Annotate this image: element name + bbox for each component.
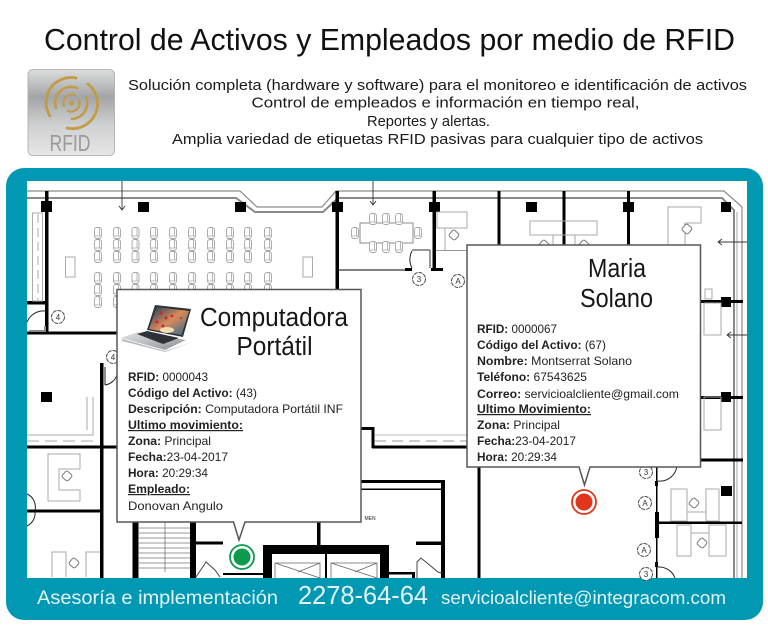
icon: green location marker (230, 545, 254, 569)
callout details: Código del Activo: (43) (128, 386, 257, 400)
callout details: Descripción: Computadora Portátil INF (128, 402, 343, 416)
classroom chairs (94, 228, 272, 308)
grid markers: 4 (56, 313, 61, 322)
callout heading: Portátil (236, 333, 312, 361)
callout heading (580, 255, 653, 313)
callout details: Ultimo Movimiento: (477, 402, 591, 416)
callout details: Fecha:23-04-2017 (128, 450, 228, 464)
callout details: RFID: 0000043 (128, 370, 208, 384)
icon: red location marker (572, 490, 596, 514)
grid markers: 3 (417, 275, 422, 284)
footer contact: 2278-64-64 (298, 582, 428, 610)
callout details: Nombre: Montserrat Solano (477, 354, 632, 368)
text block: description: Solución completa (hardware y software) para el monitoreo e identificación de activos (128, 78, 747, 94)
conference chairs (61, 214, 708, 569)
section arrows (119, 181, 747, 338)
door arcs (27, 250, 677, 578)
outer perimeter lines (27, 191, 742, 578)
callout heading: Solano (580, 285, 653, 313)
callout details (477, 322, 679, 464)
icon: laptop (121, 305, 192, 352)
callout details: Hora: 20:29:34 (128, 466, 208, 480)
grid markers: 3 (644, 570, 649, 579)
title: Control de Activos y Empleados por medio de RFID (44, 22, 735, 57)
furniture (27, 207, 726, 577)
callout heading: Maria (588, 255, 647, 283)
text block: description: Reportes y alertas. (367, 114, 490, 130)
grid markers: A (641, 546, 647, 555)
callout heading: Computadora (200, 304, 349, 332)
text block: description: Amplia variedad de etiquetas RFID pasivas para cualquier tipo de activos (172, 132, 703, 148)
room label: MEN (364, 516, 376, 522)
callout details: Ultimo movimiento: (128, 418, 243, 432)
columns (41, 201, 732, 496)
callout details: Hora: 20:29:34 (477, 450, 557, 464)
structural walls (27, 191, 743, 578)
grid markers: A (642, 499, 648, 508)
callout details: Fecha:23-04-2017 (477, 434, 576, 448)
callout details: Zona: Principal (128, 434, 211, 448)
callout details: Correo: servicioalcliente@gmail.com (477, 387, 679, 401)
footer contact: servicioalcliente@integracom.com (441, 587, 726, 608)
callout heading (200, 304, 349, 361)
callout details: Teléfono: 67543625 (477, 370, 587, 384)
icon: RFID logo (28, 70, 114, 156)
footer contact: Asesoría e implementación (37, 587, 278, 609)
callout details: RFID: 0000067 (477, 322, 557, 336)
grid markers: 4 (111, 353, 116, 362)
panel: teal frame (6, 168, 763, 620)
grid markers (52, 272, 652, 580)
grid markers: A (455, 277, 461, 286)
callout details: Código del Activo: (67) (477, 338, 606, 352)
callout details (128, 370, 343, 513)
floor plan (27, 181, 747, 580)
text block: description: Control de empleados e información en tiempo real, (252, 96, 640, 112)
text block: description (128, 78, 747, 148)
footer contact (37, 582, 726, 610)
grid markers: 3 (644, 468, 649, 477)
callout details: Donovan Angulo (128, 499, 223, 513)
callout: maria solano (467, 245, 700, 485)
icon: RFID logo: RFID (50, 130, 90, 156)
callout: computadora portatil (117, 290, 361, 540)
callout details: Empleado: (128, 482, 190, 496)
callout details: Zona: Principal (477, 418, 560, 432)
